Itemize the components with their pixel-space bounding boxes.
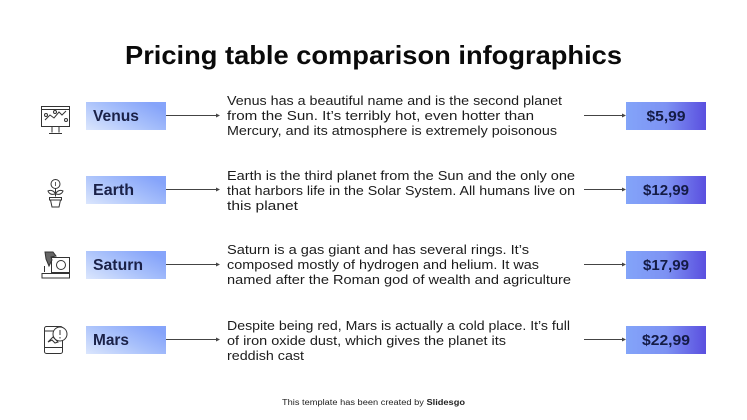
- description: Mars: reddish cast: [227, 349, 305, 363]
- description: Earth: Earth is the third planet from the Sun and the only one: [227, 169, 575, 183]
- icon: laptop with coin: [42, 252, 70, 278]
- description: Saturn: Saturn is a gas giant and has several rings. It’s: [227, 243, 529, 257]
- description: Venus: from the Sun. It’s terribly hot, even hotter than: [227, 109, 534, 123]
- price box: Saturn: $17,99: [643, 258, 689, 274]
- price box: Venus: $5,99: [646, 109, 686, 125]
- arrow: Venus label to text: [166, 114, 220, 118]
- price box: Venus: [626, 102, 706, 130]
- row: Earth: [48, 169, 706, 213]
- arrow: Mars text to price: [584, 338, 626, 342]
- icon: money plant: [48, 180, 63, 207]
- arrow: Earth text to price: [584, 188, 626, 192]
- description: Saturn: composed mostly of hydrogen and helium. It was: [227, 258, 539, 272]
- title: Pricing table comparison infographics: [125, 40, 622, 70]
- description: Earth: [227, 169, 575, 213]
- arrow: Mars label to text: [166, 338, 220, 342]
- row: Mars: [44, 319, 706, 363]
- description: Mars: [227, 319, 570, 363]
- description: Saturn: [227, 243, 571, 287]
- arrow: Saturn text to price: [584, 262, 626, 266]
- icon: monitor with chart: [42, 106, 70, 134]
- arrow: Venus text to price: [584, 114, 626, 118]
- price box: Mars: [626, 326, 706, 354]
- price box: Saturn: [626, 251, 706, 279]
- label box: Venus: Venus: [93, 108, 139, 125]
- label box: Venus: [86, 102, 166, 130]
- description: Mars: Despite being red, Mars is actually a cold place. It’s full: [227, 319, 570, 333]
- arrow: Earth label to text: [166, 188, 220, 192]
- icon: smartphone with alert: [44, 326, 67, 354]
- description: Saturn: named after the Roman god of wealth and agriculture: [227, 273, 571, 287]
- label box: Saturn: [86, 251, 166, 279]
- label box: Earth: [86, 176, 166, 204]
- description: Earth: that harbors life in the Solar System. All humans live on: [227, 184, 575, 198]
- label box: Saturn: Saturn: [93, 257, 143, 274]
- description: Mars: of iron oxide dust, which gives the planet its: [227, 334, 506, 348]
- price box: Mars: $22,99: [642, 333, 690, 349]
- price box: Earth: [626, 176, 706, 204]
- description: Venus: Venus has a beautiful name and is the second planet: [227, 94, 563, 108]
- label box: Mars: Mars: [93, 332, 129, 349]
- description: Venus: [227, 94, 563, 138]
- row: Venus: [42, 94, 706, 138]
- row: Saturn: [42, 243, 706, 287]
- arrow: Saturn label to text: [166, 262, 220, 266]
- label box: Mars: [86, 326, 166, 354]
- description: Venus: Mercury, and its atmosphere is extremely poisonous: [227, 124, 557, 138]
- label box: Earth: Earth: [93, 182, 134, 199]
- price box: Earth: $12,99: [643, 183, 689, 199]
- footer credit: This template has been created by Slidesgo: [282, 398, 465, 407]
- description: Earth: this planet: [227, 199, 299, 213]
